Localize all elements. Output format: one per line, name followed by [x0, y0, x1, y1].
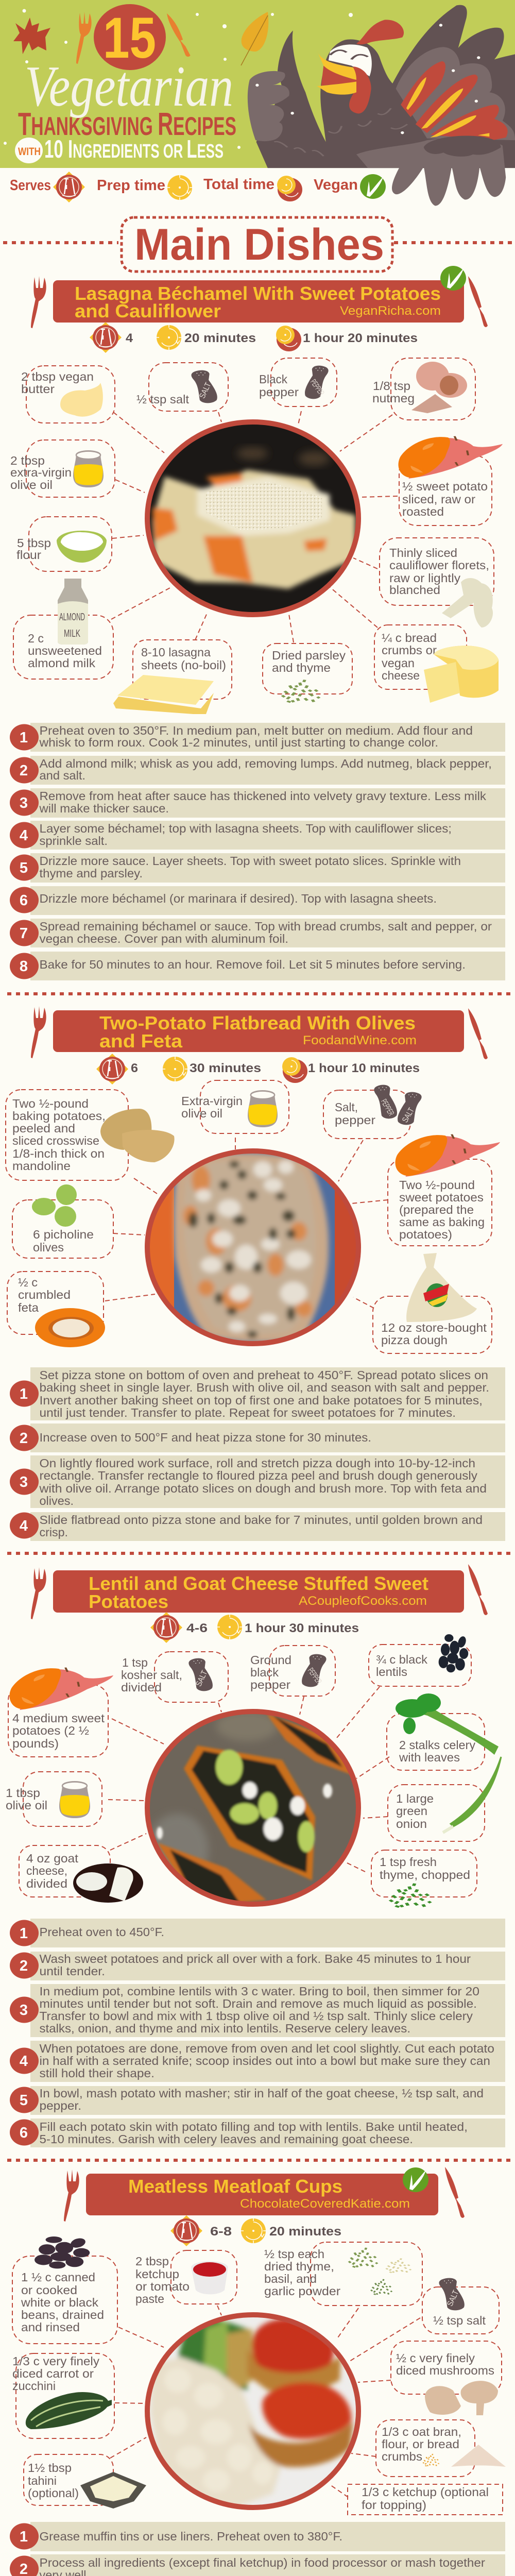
- ingredient: salt and pepper: PEPPER: [379, 1098, 396, 1117]
- step 3: In medium pot, combine lentils with 3 c water. Bring to boil, then simmer for 20: [39, 1985, 479, 1998]
- step 2: [10, 1952, 505, 1980]
- ingredient: dried herbs and garlic powder: [264, 2242, 422, 2306]
- ingredient: olive oil: olive oil: [181, 1107, 222, 1120]
- step 2: and salt.: [39, 769, 85, 782]
- ingredient: black lentils: lentils: [376, 1665, 407, 1679]
- ingredient: ketchup for topping: [348, 2484, 503, 2515]
- step 1: [10, 1367, 505, 1420]
- turkey illustration: [248, 5, 515, 206]
- ingredient: oat bran or flour: 1/3 c oat bran,: [382, 2425, 461, 2438]
- step 3: olives.: [39, 1494, 74, 1507]
- icon: yellow leaf: [241, 12, 268, 65]
- ingredient: ground black pepper: black: [250, 1666, 279, 1679]
- recipe meta: [90, 322, 418, 353]
- connectors: [110, 2306, 420, 2497]
- step 3: Remove from heat after sauce has thickened into velvety gravy texture. Less milk: [39, 789, 487, 803]
- ingredient: salt and pepper: SALT: [401, 1106, 416, 1124]
- step 1: 1: [20, 730, 28, 746]
- ingredient: bread crumbs or cheese: [374, 625, 499, 703]
- ingredient: nutmeg: [372, 358, 475, 420]
- ingredient: kosher salt: 1 tsp: [122, 1656, 148, 1669]
- ingredient: beans: and rinsed: [21, 2320, 80, 2334]
- ingredient: baking potatoes: mandoline: [12, 1159, 71, 1173]
- step 1: Preheat oven to 450°F.: [39, 1925, 164, 1939]
- step 8: 8: [20, 958, 28, 975]
- step 3: rectangle. Transfer rectangle to floured pizza peel and brush dough generously: [39, 1469, 478, 1482]
- ingredient: beans: or cooked: [21, 2283, 77, 2297]
- ingredient: pizza dough: [373, 1253, 492, 1353]
- step 4: [10, 821, 505, 850]
- recipe 1: lasagna: [10, 266, 505, 980]
- recipe 3: stuffed sweet potatoes: [6, 1564, 505, 2147]
- ingredient: fresh thyme: [371, 1850, 477, 1907]
- ingredient: butter: butter: [21, 382, 55, 396]
- recipe banner: Potatoes: [89, 1591, 168, 1612]
- ingredient: ground black pepper: [250, 1646, 335, 1696]
- ingredient: ketchup for topping: 1/3 c ketchup (optional: [362, 2485, 489, 2499]
- step 1: 1: [20, 2529, 28, 2545]
- ingredient: black pepper: pepper: [259, 385, 299, 399]
- ingredient: dried herbs and garlic powder: garlic powder: [264, 2284, 340, 2298]
- ingredient: cauliflower: [380, 538, 494, 628]
- legend: serves: Serves: [10, 177, 51, 194]
- ingredient: green onion: green: [396, 1804, 427, 1818]
- ingredient: ketchup: [135, 2250, 237, 2306]
- ingredient: parsley and thyme: and thyme: [272, 661, 331, 674]
- ingredient: kosher salt: [121, 1652, 228, 1702]
- step 4: sprinkle salt.: [39, 834, 108, 848]
- ingredient: almond milk: 2 c: [28, 632, 44, 645]
- step 4: crisp.: [39, 1526, 68, 1539]
- legend: prep time: [97, 175, 192, 200]
- ingredient: olive oil: extra-virgin: [10, 466, 72, 479]
- step 2: [10, 2554, 505, 2576]
- step 6: Drizzle more béchamel (or marinara if desired). Top with lasagna sheets.: [39, 892, 437, 905]
- ingredient: olive oil: [6, 1772, 102, 1826]
- ingredient: oat bran or flour: [376, 2420, 506, 2477]
- step 5: 5: [20, 860, 28, 876]
- ingredient: goat cheese: cheese,: [26, 1864, 67, 1877]
- legend: vegan: Vegan: [314, 177, 358, 193]
- step 1: Set pizza stone on bottom of oven and preheat to 450°F. Spread potato slices on: [39, 1368, 488, 1382]
- ingredient: ground black pepper: Ground: [250, 1653, 291, 1667]
- ingredient: tahini: [24, 2454, 146, 2509]
- ingredient: ketchup for topping: for topping): [362, 2498, 426, 2512]
- ingredient: beans: white or black: [21, 2296, 98, 2309]
- ingredient: sweet potatoes: 4 medium sweet: [12, 1711, 105, 1725]
- connectors: [105, 1138, 388, 1308]
- ingredient: salt: SALT: [445, 2289, 460, 2308]
- recipe banner: [31, 266, 488, 328]
- ingredient: olive oil: 1 tbsp: [6, 1786, 40, 1800]
- recipe meta: [170, 2215, 341, 2246]
- recipe meta: 4: [126, 331, 133, 345]
- ingredient: salt and pepper: [323, 1085, 422, 1139]
- step 1: 1: [20, 1386, 28, 1402]
- cooking steps: [10, 723, 505, 980]
- ingredient: sweet potato: [398, 436, 503, 526]
- recipe meta: 1 hour 10 minutes: [308, 1061, 420, 1075]
- recipe banner: Meatless Meatloaf Cups: [128, 2176, 342, 2197]
- ingredient: tahini: 1½ tbsp: [28, 2461, 72, 2475]
- ingredient: kosher salt: divided: [121, 1681, 162, 1694]
- ingredient: kosher salt: kosher salt,: [121, 1668, 182, 1682]
- step 2: Process all ingredients (except final ketchup) in food processor or mash together: [39, 2556, 485, 2569]
- ingredient: olive oil: olive oil: [6, 1799, 47, 1812]
- ingredient: zucchini: [12, 2353, 114, 2438]
- ingredient: green onion: onion: [396, 1817, 427, 1831]
- ingredient: feta: [7, 1272, 105, 1347]
- step 4: still hold their shape.: [39, 2066, 154, 2080]
- recipe meta: 1 hour 30 minutes: [245, 1621, 359, 1635]
- ingredient: baking potatoes: [6, 1090, 175, 1180]
- ingredient: baking potatoes: sliced crosswise: [12, 1134, 99, 1147]
- step 1: whisk to form roux. Cook 1-2 minutes, until just starting to change color.: [39, 736, 438, 749]
- step 3: 3: [20, 1474, 28, 1490]
- recipe meta: 6: [131, 1061, 138, 1075]
- number badge 15: 15: [103, 6, 156, 70]
- ingredient: sweet potato: sliced, raw or: [402, 493, 475, 506]
- legend: [10, 172, 386, 202]
- ingredient: nutmeg: nutmeg: [372, 392, 415, 405]
- step 8: [10, 952, 505, 980]
- step 6: 6: [20, 892, 28, 909]
- ingredient: butter: [21, 366, 115, 423]
- ingredient: cauliflower: cauliflower florets,: [389, 558, 489, 572]
- ingredient: ketchup: 2 tbsp: [135, 2255, 169, 2268]
- step 7: vegan cheese. Cover pan with aluminum foil.: [39, 932, 288, 945]
- ingredient: cauliflower: raw or lightly: [389, 571, 460, 585]
- step 5: [10, 2086, 505, 2115]
- ingredient: olive oil: olive oil: [10, 478, 53, 492]
- ingredient: zucchini: 1/3 c very finely: [12, 2354, 99, 2368]
- recipe meta: 20 minutes: [269, 2225, 341, 2239]
- ingredient: goat cheese: 4 oz goat: [26, 1852, 78, 1865]
- step 1: [10, 723, 505, 752]
- ingredient: almond milk: almond milk: [28, 656, 95, 670]
- step 3: with olive oil. Arrange potato slices on dough and brush more. Top with feta and: [39, 1482, 487, 1495]
- ingredient: goat cheese: [19, 1845, 143, 1903]
- title: 10 ingredients or less: 10 INGREDIENTS OR LESS: [44, 135, 224, 163]
- ingredient: lasagna sheets: [113, 640, 232, 714]
- ingredient: parsley and thyme: [263, 643, 352, 702]
- recipe 2: flatbread: [6, 1006, 505, 1541]
- ingredient: pizza dough: pizza dough: [381, 1333, 448, 1347]
- step 6: [10, 2119, 505, 2147]
- cooking steps: [10, 1367, 505, 1541]
- ingredient: baking potatoes: 1/8-inch thick on: [12, 1147, 105, 1160]
- ingredient: nutmeg: 1/8 tsp: [373, 379, 410, 393]
- title: vegetarian: Vegetarian: [25, 55, 233, 118]
- ingredient: tahini: (optional): [28, 2486, 79, 2500]
- ingredient: dried herbs and garlic powder: ½ tsp each: [264, 2247, 324, 2261]
- ingredient: mushrooms: diced mushrooms: [396, 2364, 494, 2377]
- ingredient: sweet potatoes: potatoes (2 ½: [12, 1724, 89, 1737]
- food photo: lasagna: [145, 419, 361, 617]
- step 1: until just tender. Transfer to plate. Repeat for sweet potatoes for 7 minutes.: [39, 1406, 456, 1419]
- food photo: meatloaf cups: [145, 2312, 361, 2510]
- ingredient: sweet potatoes: [8, 1668, 113, 1757]
- ingredient: sweet potato: roasted: [402, 505, 444, 518]
- ingredient: feta: crumbled: [18, 1288, 71, 1301]
- ingredient: ketchup: ketchup: [135, 2267, 179, 2281]
- ingredient: feta: feta: [18, 1301, 39, 1314]
- step 6: Fill each potato skin with potato filling and top with lentils. Bake until heated,: [39, 2120, 468, 2133]
- icon: knife: [167, 13, 191, 57]
- ingredient: green onion: 1 large: [396, 1792, 434, 1805]
- step 3: 3: [20, 2002, 28, 2019]
- recipe banner: ChocolateCoveredKatie.com: [240, 2197, 410, 2211]
- cooking steps: [10, 2522, 505, 2576]
- step 6: 5-10 minutes. Garish with celery leaves and remaining goat cheese.: [39, 2132, 413, 2146]
- step 2: [10, 1423, 505, 1452]
- ingredient: zucchini: diced carrot or: [12, 2367, 94, 2380]
- recipe meta: [150, 1612, 359, 1643]
- step 2: 2: [20, 762, 28, 779]
- step 5: 5: [20, 2092, 28, 2109]
- step 1: Preheat oven to 350°F. In medium pan, melt butter on medium. Add flour and: [39, 724, 473, 737]
- step 4: Layer some béchamel; top with lasagna sheets. Top with cauliflower slices;: [39, 822, 452, 835]
- ingredient: salt: [136, 363, 228, 411]
- ingredient: baking potatoes: peeled and: [12, 1122, 75, 1135]
- ingredient: bread crumbs or cheese: ¼ c bread: [382, 631, 437, 645]
- step 4: 4: [20, 827, 28, 844]
- ingredient: olive oil: [10, 440, 115, 497]
- ingredient: dried herbs and garlic powder: basil, and: [264, 2272, 317, 2285]
- step 2: until tender.: [39, 1964, 105, 1978]
- ingredient: sweet potatoes: sweet potatoes: [399, 1191, 484, 1204]
- step 4: When potatoes are done, remove from oven and let cool slightly. Cut each potato: [39, 2042, 494, 2055]
- ingredient: sweet potato: ½ sweet potato: [402, 480, 488, 493]
- ingredient: butter: 2 tbsp vegan: [21, 370, 94, 383]
- step 3: [10, 788, 505, 818]
- recipe banner: and Cauliflower: [75, 300, 221, 321]
- ingredient: almond milk: MILK: [64, 628, 80, 639]
- legend: total time: Total time: [203, 176, 274, 193]
- step 3: [10, 1984, 505, 2037]
- ingredient: sweet potatoes: pounds): [12, 1737, 59, 1750]
- ingredient: salt and pepper: pepper: [335, 1113, 375, 1127]
- step 6: [10, 886, 505, 915]
- step 3: [10, 1455, 505, 1508]
- recipe banner: [31, 1564, 488, 1619]
- step 1: [10, 2522, 505, 2551]
- ingredient: black pepper: Black: [259, 372, 287, 386]
- ingredient: black lentils: [369, 1634, 471, 1686]
- step 7: Spread remaining béchamel or sauce. Top with bread crumbs, salt and pepper, or: [39, 920, 492, 933]
- step 3: minutes until tender but not soft. Drain and remove as much liquid as possible.: [39, 1997, 477, 2010]
- ingredient: tahini: tahini: [28, 2474, 57, 2487]
- food photo: flatbread: [145, 1148, 366, 1346]
- step 1: 1: [20, 1925, 28, 1942]
- step 5: thyme and parsley.: [39, 867, 143, 880]
- ingredient: celery: [387, 1693, 499, 1770]
- step 3: Transfer to bowl and mix with 1 tbsp olive oil and ½ tsp salt. Thinly slice celery: [39, 2009, 473, 2023]
- step 3: 3: [20, 795, 28, 811]
- food photo: stuffed sweet potatoes: [145, 1709, 361, 1907]
- recipe banner: Lasagna Béchamel With Sweet Potatoes: [75, 283, 441, 304]
- ingredient: zucchini: zucchini: [12, 2379, 56, 2393]
- ingredient: cauliflower: blanched: [389, 583, 440, 597]
- heading: main dishes: Main Dishes: [134, 220, 384, 269]
- ingredient: ketchup: paste: [135, 2292, 164, 2306]
- ingredient: sweet potatoes: same as baking: [399, 1215, 485, 1229]
- recipe banner: FoodandWine.com: [303, 1033, 417, 1047]
- ingredient: lasagna sheets: 8-10 lasagna: [141, 646, 211, 659]
- step 6: 6: [20, 2125, 28, 2141]
- ingredient: green onion: [388, 1757, 501, 1841]
- legend: serves: [10, 172, 85, 202]
- ingredient: olive oil: [181, 1080, 289, 1133]
- step 2: [10, 756, 505, 785]
- ingredient: feta: ½ c: [18, 1276, 38, 1289]
- connectors: [108, 1687, 389, 1872]
- ingredient: ketchup: or tomato: [135, 2280, 190, 2293]
- ingredient: beans: 1 ½ c canned: [21, 2270, 95, 2284]
- ingredient: ground black pepper: PEPPER: [306, 1667, 323, 1686]
- badge: with: [15, 138, 43, 163]
- step 5: [10, 853, 505, 883]
- ingredient: oat bran or flour: crumbs: [382, 2450, 422, 2463]
- ingredient: sweet potatoes: [388, 1134, 500, 1246]
- ingredient: ground black pepper: pepper: [250, 1678, 290, 1691]
- legend: total time: [203, 176, 302, 201]
- step 1: Invert another baking sheet on top of first one and bake potatoes for 5 minutes,: [39, 1394, 483, 1407]
- recipe meta: 4-6: [186, 1621, 208, 1635]
- step 5: pepper.: [39, 2099, 81, 2112]
- step 1: [10, 1919, 505, 1947]
- ingredient: black pepper: [259, 358, 337, 406]
- step 2: Wash sweet potatoes and prick all over with a fork. Bake 45 minutes to 1 hour: [39, 1952, 471, 1965]
- recipe banner: and Feta: [99, 1030, 183, 1052]
- step 2: 2: [20, 1958, 28, 1974]
- ingredient: flour: [16, 517, 112, 571]
- ingredient: bread crumbs or cheese: cheese: [382, 669, 420, 682]
- ingredient: bread crumbs or cheese: crumbs or: [382, 643, 437, 657]
- step 4: 4: [20, 1518, 28, 1534]
- ingredient: sweet potatoes: (prepared the: [399, 1203, 474, 1216]
- step 4: [10, 1512, 505, 1541]
- ingredient: salt: ½ tsp salt: [136, 393, 189, 406]
- title: thanksgiving recipes: THANKSGIVING RECIPES: [18, 107, 236, 142]
- ingredient: parsley and thyme: Dried parsley: [272, 649, 346, 662]
- ingredient: mushrooms: [391, 2341, 502, 2415]
- ingredient: black lentils: ¾ c black: [376, 1653, 427, 1666]
- ingredient: flour: flour: [16, 548, 41, 562]
- ingredient: olives: olives: [33, 1241, 64, 1254]
- ingredient: flour: 5 tbsp: [17, 536, 51, 550]
- cooking steps: [10, 1919, 505, 2147]
- connectors: [111, 411, 398, 642]
- step 7: 7: [20, 925, 28, 942]
- ingredient: oat bran or flour: flour, or bread: [382, 2437, 459, 2451]
- ingredient: sweet potatoes: Two ½-pound: [399, 1178, 475, 1192]
- step 4: 4: [20, 2053, 28, 2070]
- ingredient: olive oil: Extra-virgin: [181, 1094, 243, 1108]
- recipe meta: [96, 1054, 420, 1084]
- step 5: Drizzle more sauce. Layer sheets. Top with sweet potato slices. Sprinkle with: [39, 854, 461, 868]
- ingredient: beans: [12, 2236, 117, 2344]
- recipe meta: 6-8: [210, 2225, 232, 2239]
- step 4: Slide flatbread onto pizza stone and bake for 7 minutes, until golden brown and: [39, 1513, 483, 1527]
- ingredient: beans: beans, drained: [21, 2308, 104, 2321]
- ingredient: celery: 2 stalks celery: [399, 1738, 475, 1752]
- step 2: 2: [20, 1430, 28, 1447]
- ingredient: mushrooms: ½ c very finely: [396, 2351, 475, 2365]
- recipe 4: meatless meatloaf cups: [10, 2167, 506, 2576]
- recipe meta: 20 minutes: [184, 331, 256, 345]
- ingredient: dried herbs and garlic powder: dried thyme,: [264, 2260, 334, 2273]
- icon: maple leaf: [13, 18, 50, 54]
- recipe banner: Lentil and Goat Cheese Stuffed Sweet: [89, 1573, 428, 1594]
- ingredient: fresh thyme: thyme, chopped: [380, 1868, 470, 1882]
- ingredient: olives: 6 picholine: [33, 1228, 94, 1241]
- ingredient: almond milk: unsweetened: [28, 644, 102, 657]
- step 2: Increase oven to 500°F and heat pizza stone for 30 minutes.: [39, 1431, 371, 1444]
- snow dots: [4, 9, 353, 149]
- step 3: stalks, onion, and thyme and mix into lentils. Reserve celery leaves.: [39, 2022, 410, 2035]
- ingredient: salt: ½ tsp salt: [433, 2314, 486, 2327]
- ingredient: olives: [12, 1184, 113, 1258]
- step 4: in half with a serrated knife; scoop insides out into a bowl but make sure they can: [39, 2054, 490, 2067]
- header banner: [0, 0, 515, 168]
- legend: vegan: [314, 174, 386, 199]
- ingredient: pizza dough: 12 oz store-bought: [381, 1321, 487, 1334]
- step 3: On lightly floured work surface, roll and stretch pizza dough into 10-by-12-inch: [39, 1456, 475, 1470]
- recipe banner: ACoupleofCooks.com: [299, 1594, 427, 1608]
- ingredient: celery: with leaves: [399, 1751, 460, 1764]
- ingredient: salt: [422, 2278, 499, 2334]
- ingredient: salt and pepper: Salt,: [335, 1100, 358, 1114]
- ingredient: sweet potatoes: potatoes): [399, 1228, 452, 1241]
- ingredient: baking potatoes: baking potatoes,: [12, 1109, 106, 1123]
- ingredient: goat cheese: divided: [26, 1877, 67, 1890]
- step 8: Bake for 50 minutes to an hour. Remove foil. Let sit 5 minutes before serving.: [39, 958, 466, 971]
- step 3: will make thicker sauce.: [39, 802, 169, 815]
- step 7: [10, 919, 505, 947]
- ingredient: almond milk: [13, 579, 113, 679]
- step 5: In bowl, mash potato with masher; stir in half of the goat cheese, ½ tsp salt, and: [39, 2087, 484, 2100]
- ingredient: olive oil: 2 tbsp: [10, 454, 45, 467]
- ingredient: fresh thyme: 1 tsp fresh: [380, 1855, 437, 1869]
- badge: with: WITH: [18, 146, 41, 158]
- recipe meta: 30 minutes: [190, 1061, 261, 1075]
- ingredient: black pepper: PEPPER: [308, 378, 325, 397]
- icon: fork: [76, 12, 92, 64]
- ingredient: almond milk: ALMOND: [59, 612, 85, 623]
- ingredient: salt: SALT: [198, 381, 213, 400]
- ingredient: lasagna sheets: sheets (no-boil): [141, 658, 226, 672]
- recipe banner: Two-Potato Flatbread With Olives: [99, 1012, 416, 1033]
- ingredient: baking potatoes: Two ½-pound: [12, 1097, 89, 1110]
- ingredient: cauliflower: Thinly sliced: [389, 546, 457, 560]
- step 1: Grease muffin tins or use liners. Preheat oven to 380°F.: [39, 2530, 342, 2543]
- recipe banner: [31, 1006, 488, 1059]
- step 4: [10, 2041, 505, 2082]
- recipe banner: [64, 2167, 465, 2222]
- ingredient: kosher salt: SALT: [194, 1669, 209, 1688]
- step 2: Add almond milk; whisk as you add, removing lumps. Add nutmeg, black pepper,: [39, 757, 492, 770]
- ingredient: bread crumbs or cheese: vegan: [382, 656, 415, 670]
- legend: prep time: Prep time: [97, 177, 165, 194]
- step 1: baking sheet in single layer. Brush with olive oil, and season with salt and pepper.: [39, 1381, 489, 1394]
- recipe banner: VeganRicha.com: [340, 304, 441, 318]
- recipe meta: 1 hour 20 minutes: [303, 331, 418, 345]
